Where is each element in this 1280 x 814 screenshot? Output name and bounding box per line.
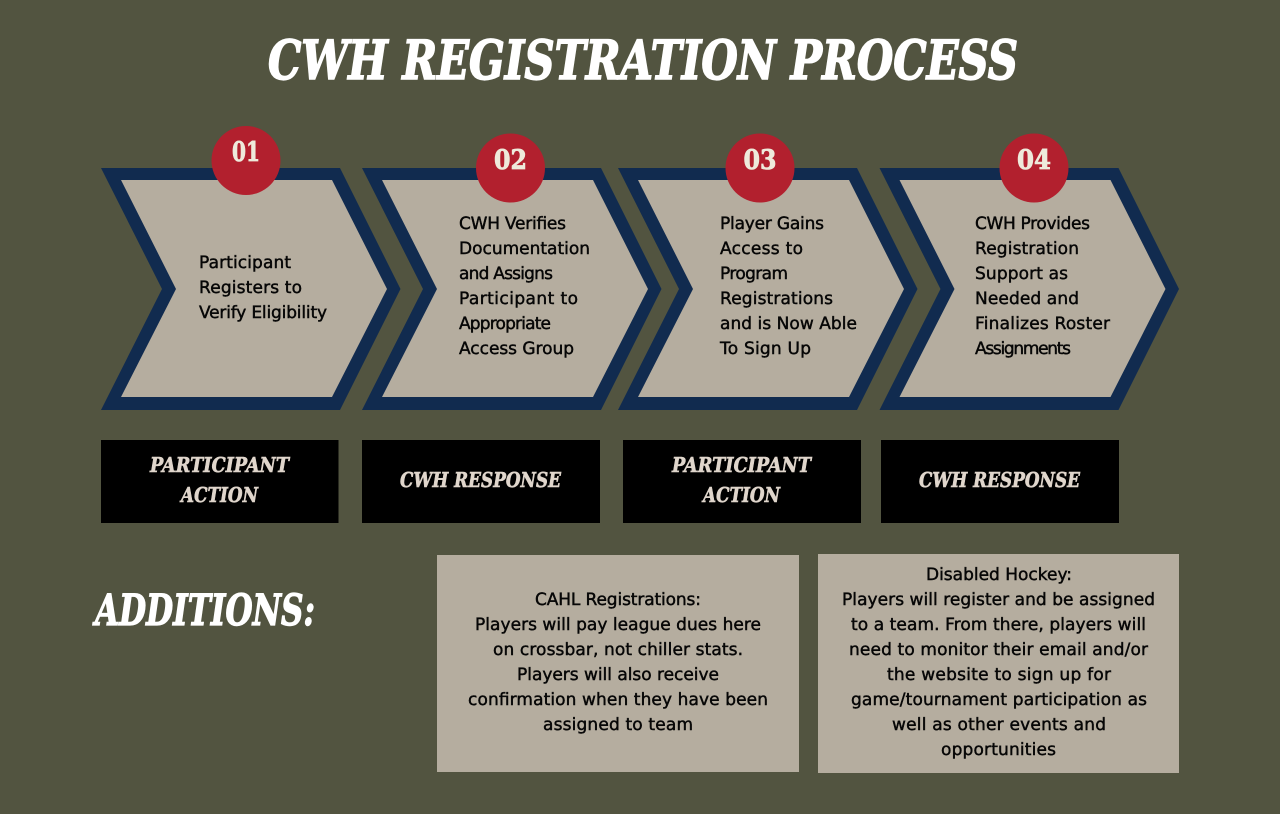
label: participant action 2 <box>623 440 861 523</box>
step 1 text: Participant <box>199 253 291 273</box>
step 3 text: Access to <box>720 239 803 259</box>
step 1 text: Registers to <box>199 278 302 298</box>
CAHL text <box>468 590 768 735</box>
step 4 text: CWH Provides <box>975 214 1090 234</box>
badge 04: 04 <box>1017 145 1051 176</box>
panel: disabled hockey <box>818 554 1179 773</box>
badge 02 <box>476 134 545 202</box>
panel: CAHL registrations <box>437 555 799 772</box>
step 1 text <box>199 253 327 323</box>
step 4 text: Assignments <box>975 339 1071 359</box>
badge 01 <box>212 126 280 195</box>
label: participant action 2: PARTICIPANT <box>671 453 813 477</box>
label: CWH response 1: CWH RESPONSE <box>400 468 561 492</box>
badge 01: 01 <box>232 137 260 168</box>
step 4 text: Needed and <box>975 289 1079 309</box>
disabled hockey text: Players will register and be assigned <box>842 590 1155 610</box>
step 2 text: Appropriate <box>459 314 551 334</box>
step 4 text <box>975 214 1110 359</box>
step 1: participant registers <box>101 126 400 410</box>
step 4 text: Support as <box>975 264 1068 284</box>
step 3 text: Program <box>720 264 788 284</box>
CAHL text: CAHL Registrations: <box>535 590 701 610</box>
label: participant action 2: ACTION <box>701 483 781 507</box>
step 3 text <box>719 214 857 359</box>
CAHL text: on crossbar, not chiller stats. <box>493 640 743 660</box>
title: CWH REGISTRATION PROCESS <box>268 28 1018 92</box>
label: CWH response 1 <box>362 440 600 523</box>
disabled hockey text: well as other events and <box>892 715 1106 735</box>
CAHL text: confirmation when they have been <box>468 690 768 710</box>
label: CWH response 2: CWH RESPONSE <box>919 468 1080 492</box>
heading: additions: ADDITIONS: <box>92 586 315 636</box>
disabled hockey text: need to monitor their email and/or <box>849 640 1148 660</box>
badge 03: 03 <box>744 145 776 176</box>
chevron 4 <box>880 168 1179 410</box>
disabled hockey text: to a team. From there, players will <box>851 615 1146 635</box>
step 3 text: Registrations <box>720 289 833 309</box>
label: CWH response 2 <box>881 440 1119 523</box>
chevron 2 <box>362 168 662 410</box>
step 2 text: Access Group <box>459 339 574 359</box>
step 4 text: Registration <box>975 239 1079 259</box>
disabled hockey text <box>842 565 1155 760</box>
step 2 text: Documentation <box>459 239 590 259</box>
badge 03 <box>726 134 794 202</box>
label: participant action 1: PARTICIPANT <box>149 453 291 477</box>
disabled hockey text: game/tournament participation as <box>851 690 1147 710</box>
step 3: player gains access <box>618 134 918 410</box>
step 3 text: To Sign Up <box>719 339 811 359</box>
step 2 text: CWH Verifies <box>459 214 566 234</box>
badge 02: 02 <box>494 145 527 176</box>
step 4 text: Finalizes Roster <box>975 314 1110 334</box>
CAHL text: assigned to team <box>543 715 693 735</box>
disabled hockey text: opportunities <box>941 740 1056 760</box>
step 3 text: Player Gains <box>720 214 824 234</box>
disabled hockey text: Disabled Hockey: <box>926 565 1072 585</box>
badge 04 <box>1000 134 1068 202</box>
chevron 1 <box>101 168 400 410</box>
step 2 text: and Assigns <box>459 264 553 284</box>
step 2: CWH verifies <box>362 134 662 410</box>
disabled hockey text: the website to sign up for <box>887 665 1111 685</box>
step 1 text: Verify Eligibility <box>199 303 327 323</box>
step 3 text: and is Now Able <box>720 314 857 334</box>
label: participant action 1: ACTION <box>179 483 259 507</box>
step 4: CWH provides support <box>880 134 1179 410</box>
chevron 3 <box>618 168 918 410</box>
step 2 text <box>459 214 590 359</box>
step 2 text: Participant to <box>459 289 578 309</box>
label: participant action 1 <box>101 440 338 523</box>
CAHL text: Players will also receive <box>517 665 719 685</box>
CAHL text: Players will pay league dues here <box>475 615 761 635</box>
